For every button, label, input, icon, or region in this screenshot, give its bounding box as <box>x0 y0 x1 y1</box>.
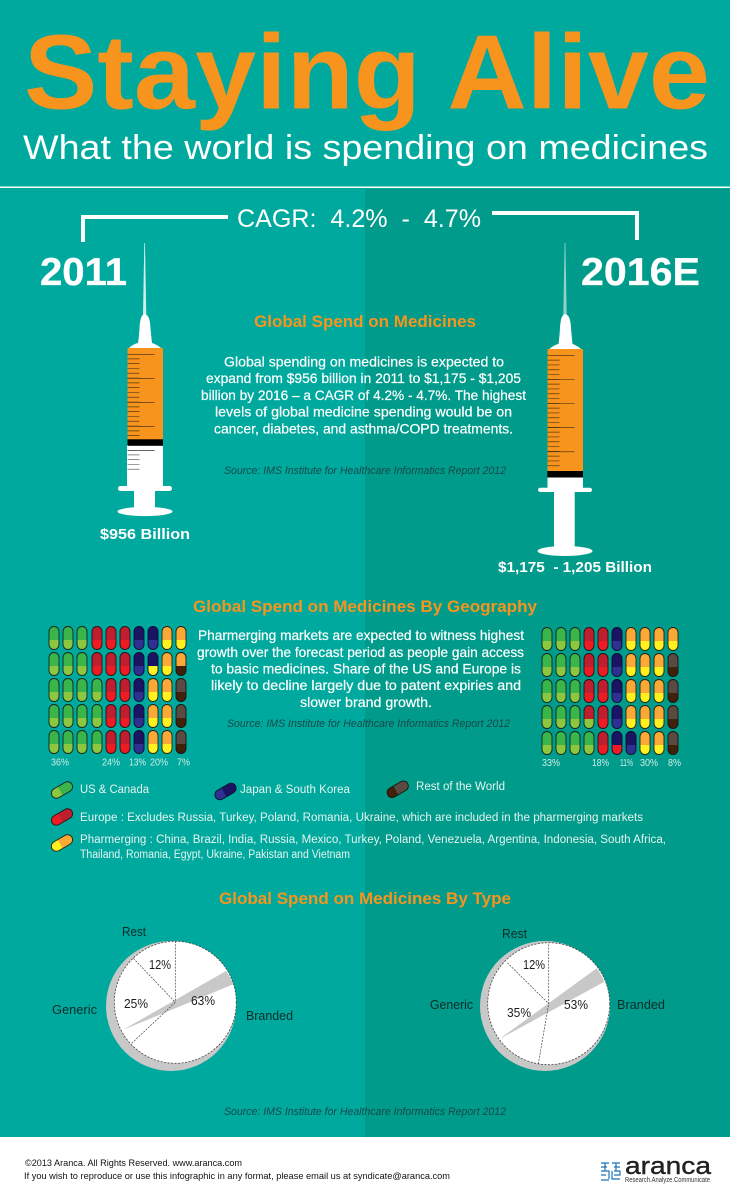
source 3: Source: IMS Institute for Healthcare Informatics Report 2012 <box>224 1106 506 1118</box>
percent labels 2011: 20% <box>150 758 168 768</box>
source 1: Source: IMS Institute for Healthcare Informatics Report 2012 <box>224 465 506 477</box>
pie chart 2016E: 35% <box>507 1005 531 1020</box>
pie chart 2011 <box>52 924 293 1071</box>
text block: global spend: levels of global medicine spending would be on <box>215 404 512 420</box>
percent labels 2016E <box>542 758 681 769</box>
pie chart 2011: Rest <box>122 924 146 939</box>
footer band <box>0 1137 730 1200</box>
pie chart 2011: 12% <box>149 957 171 972</box>
percent labels 2011: 36% <box>51 758 69 768</box>
percent labels 2016E: 30% <box>640 758 658 769</box>
pill chart 2011 <box>49 626 186 754</box>
aranca logo: aranca <box>625 1153 712 1180</box>
pie chart 2011: Generic <box>52 1002 97 1017</box>
footer text <box>24 1158 450 1182</box>
CAGR bracket and label: CAGR: 4.2% - 4.7% <box>237 205 481 233</box>
legend: Europe: Europe : Excludes Russia, Turkey, Poland, Romania, Ukraine, which are included in the pharmerging markets <box>80 812 643 824</box>
percent labels 2016E: 11% <box>620 758 633 769</box>
aranca logo: Research.Analyze.Communicate <box>625 1177 710 1184</box>
header divider <box>0 186 730 188</box>
subtitle: What the world is spending on medicines <box>23 129 708 167</box>
pill chart 2016E <box>542 628 678 754</box>
source 2: Source: IMS Institute for Healthcare Informatics Report 2012 <box>227 718 510 730</box>
title: Staying Alive <box>24 14 710 132</box>
text block: global spend: expand from $956 billion in 2011 to $1,175 - $1,205 <box>206 370 521 386</box>
year 2011: 2011 <box>40 251 127 294</box>
legend: Europe <box>50 807 643 827</box>
text block: geography: growth over the forecast period as people gain access <box>197 644 524 660</box>
legend: US and Canada: US & Canada <box>80 784 150 796</box>
right darker panel <box>365 189 730 1137</box>
legend: Pharmerging <box>50 833 666 861</box>
pie chart 2016E: Rest <box>502 926 527 941</box>
legend: Japan and South Korea <box>213 781 351 802</box>
icon: aranca mark <box>601 1163 620 1180</box>
percent labels 2016E: 18% <box>592 758 609 769</box>
pie chart 2016E: 53% <box>564 997 588 1012</box>
syringe 2011 <box>118 243 172 516</box>
text block: geography: likely to decline largely due to patent expiries and <box>211 677 521 693</box>
text block: global spend: Global spending on medicines is expected to <box>224 354 504 370</box>
heading: global spend: Global Spend on Medicines <box>254 312 476 331</box>
percent labels 2016E: 8% <box>668 758 681 769</box>
CAGR bracket and label <box>83 205 637 242</box>
percent labels 2016E: 33% <box>542 758 560 769</box>
legend: Pharmerging: Thailand, Romania, Egypt, Ukraine, Pakistan and Vietnam <box>80 849 350 861</box>
heading: type: Global Spend on Medicines By Type <box>219 889 511 908</box>
text block: geography <box>197 627 524 710</box>
text block: geography: Pharmerging markets are expected to witness highest <box>198 627 524 643</box>
pie chart 2016E: Generic <box>430 997 473 1012</box>
legend: Rest of the World <box>385 779 505 799</box>
percent labels 2011: 7% <box>177 758 190 768</box>
pie chart 2011: 25% <box>124 996 148 1011</box>
text block: global spend: billion by 2016 – a CAGR of 4.2% - 4.7%. The highest <box>201 387 526 403</box>
pie chart 2016E: Branded <box>617 997 665 1012</box>
percent labels 2011: 24% <box>102 758 120 768</box>
year 2016E: 2016E <box>581 251 700 294</box>
footer text: If you wish to reproduce or use this infographic in any format, please email us at syndicate@aranca.com <box>24 1171 450 1182</box>
label 1175-1205 billion: $1,175 - 1,205 Billion <box>498 559 652 576</box>
percent labels 2011: 13% <box>129 758 146 768</box>
pie chart 2016E: 12% <box>523 957 545 972</box>
legend <box>50 779 666 861</box>
pie chart 2011: 63% <box>191 993 215 1008</box>
text block: global spend <box>201 354 526 436</box>
percent labels 2011 <box>51 758 190 768</box>
aranca logo <box>601 1153 712 1184</box>
legend: Japan and South Korea: Japan & South Korea <box>240 784 351 796</box>
text block: geography: slower brand growth. <box>300 694 432 710</box>
legend: US and Canada <box>50 780 150 800</box>
pie chart 2011: Branded <box>246 1008 293 1023</box>
syringe 2016E <box>538 243 592 556</box>
legend: Rest of the World: Rest of the World <box>416 781 505 793</box>
footer text: ©2013 Aranca. All Rights Reserved. www.aranca.com <box>25 1158 242 1169</box>
legend: Pharmerging: Pharmerging : China, Brazil, India, Russia, Mexico, Turkey, Poland, Venezuela, Argentina, Indonesia, South Africa, <box>80 834 666 846</box>
pie chart 2016E <box>430 926 665 1071</box>
heading: geography: Global Spend on Medicines By Geography <box>193 597 538 616</box>
label 956 billion: $956 Billion <box>100 526 190 543</box>
text block: geography: to basic medicines. Share of the US and Europe is <box>211 660 521 676</box>
text block: global spend: cancer, diabetes, and asthma/COPD treatments. <box>214 420 513 436</box>
